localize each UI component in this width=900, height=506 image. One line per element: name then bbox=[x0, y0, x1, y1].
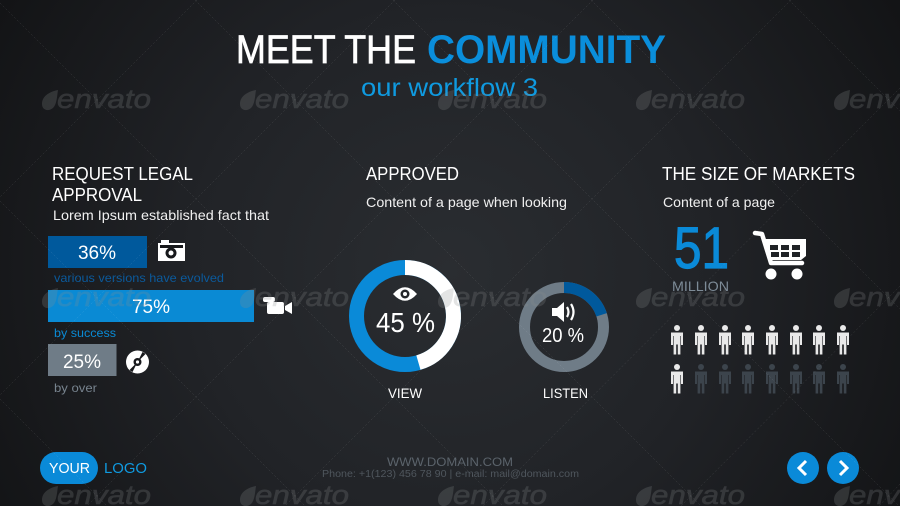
label: listen: LISTEN bbox=[543, 385, 588, 401]
donut: listen 20% bbox=[524, 288, 604, 366]
value: 20 % bbox=[542, 325, 584, 347]
logo bbox=[40, 452, 147, 484]
logo: YOUR bbox=[49, 460, 90, 477]
donut: view 45% bbox=[356, 268, 454, 364]
bar 36% bbox=[48, 236, 147, 268]
bar 75% bbox=[48, 290, 254, 322]
description: Content of a page bbox=[663, 194, 775, 210]
title: MEET THE bbox=[236, 28, 416, 72]
icon: disc bbox=[126, 350, 149, 374]
label: view: VIEW bbox=[388, 385, 423, 401]
value: 45 % bbox=[376, 307, 435, 338]
panel: request legal approval bbox=[48, 164, 292, 395]
bar 75%: 75% bbox=[132, 297, 170, 318]
icon: camera bbox=[158, 240, 185, 261]
icon: video camera bbox=[263, 297, 292, 314]
label: million: MILLION bbox=[672, 278, 729, 294]
heading: APPROVAL bbox=[52, 185, 142, 205]
button: previous bbox=[787, 452, 819, 484]
button: next bbox=[827, 452, 859, 484]
title: COMMUNITY bbox=[427, 28, 666, 72]
heading: REQUEST LEGAL bbox=[52, 164, 193, 184]
bar 36%: 36% bbox=[78, 243, 116, 264]
footer contact: WWW.DOMAIN.COM bbox=[387, 455, 513, 469]
label: various versions: various versions have evolved bbox=[54, 271, 224, 285]
footer contact bbox=[322, 455, 579, 480]
panel: size of markets bbox=[662, 164, 855, 394]
description: Content of a page when looking bbox=[366, 194, 567, 210]
people pictogram row 1 bbox=[671, 325, 849, 354]
bar 25%: 25% bbox=[63, 352, 101, 373]
logo: LOGO bbox=[104, 460, 147, 477]
icon: shopping cart bbox=[755, 233, 806, 280]
icon: eye bbox=[393, 287, 417, 301]
heading: APPROVED bbox=[366, 164, 459, 184]
people pictogram row 2 bbox=[671, 364, 849, 394]
bar 25% bbox=[48, 344, 116, 376]
panel: approved bbox=[356, 164, 604, 401]
heading bbox=[52, 164, 193, 205]
heading: THE SIZE OF MARKETS bbox=[662, 164, 855, 184]
label: by success: by success bbox=[54, 326, 116, 340]
title bbox=[236, 28, 666, 72]
icon: speaker bbox=[552, 302, 574, 322]
label: by over: by over bbox=[54, 381, 97, 395]
description: Lorem Ipsum established fact that bbox=[53, 207, 269, 223]
footer contact: Phone: +1(123) 456 78 90 | e-mail: mail@domain.com bbox=[322, 469, 579, 480]
big number: 51 bbox=[674, 216, 729, 281]
subtitle: our workflow 3 bbox=[361, 74, 538, 102]
